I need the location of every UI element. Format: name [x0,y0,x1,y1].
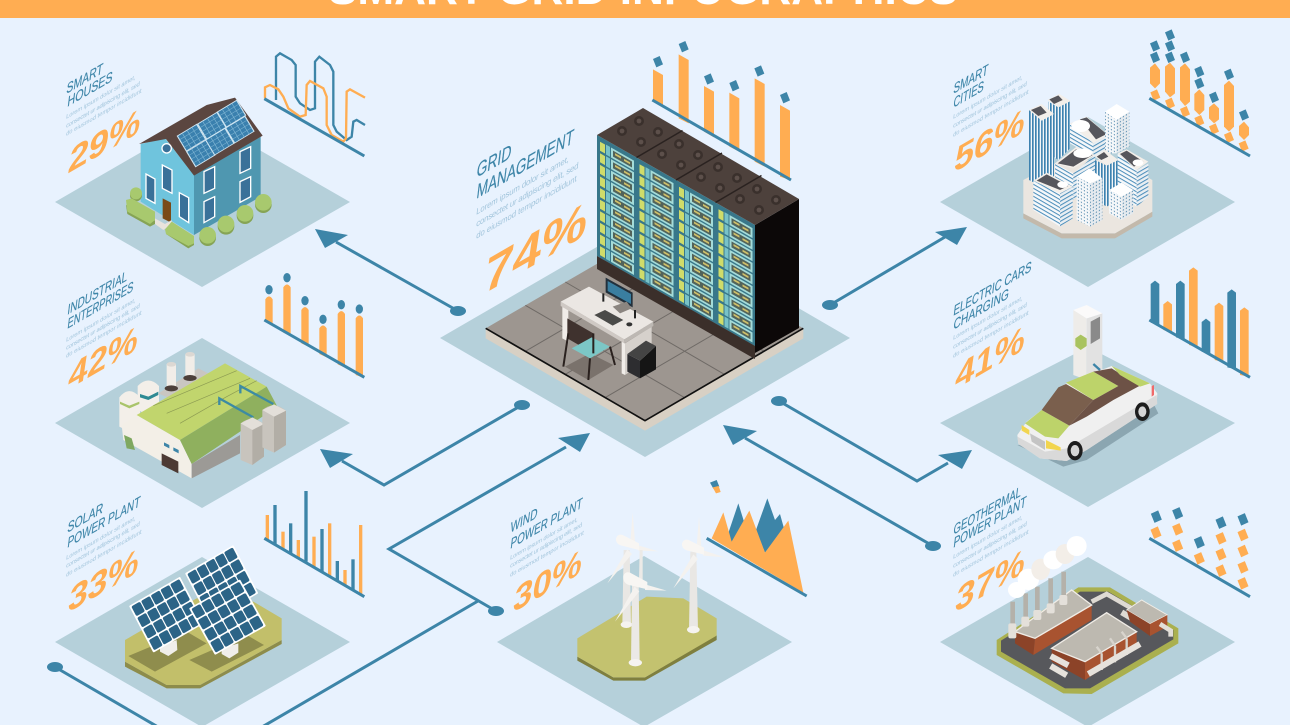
text block: do eiusmod tempor incididunt [953,528,1029,579]
plate [497,556,792,725]
marker chart [1149,29,1250,156]
heading: wind power plant: WIND [510,504,538,537]
bar chart [264,273,364,377]
arrow: geothermal to grid [723,425,941,551]
heading: solar power plant: POWER PLANT [67,493,141,552]
icon: floor platform [486,236,803,431]
panel: geothermal power plant [940,483,1250,725]
marker chart [1149,507,1250,597]
text block: consectet ur adipiscing elit, sed [510,521,583,570]
panel: solar power plant [55,491,364,725]
panel: smart cities [940,29,1250,287]
text block: Lorem ipsum dolor sit amet, [953,514,1023,561]
heading: grid management: GRID [475,140,513,183]
panel: industrial enterprises [55,268,364,508]
heading: grid management [475,125,575,204]
text block: do eiusmod tempor incididunt [66,528,142,579]
heading: geothermal power plant: GEOTHERMAL [953,483,1022,539]
icon: house [126,98,272,248]
plate [940,347,1235,507]
heading: industrial enterprises: ENTERPRISES [67,278,134,333]
text block: Lorem ipsum dolor sit amet, [510,516,578,562]
text block: consectet ur adipiscing elit, sed [953,80,1027,130]
heading: electric cars charging: CHARGING [953,285,1010,334]
text block: Lorem ipsum dolor sit amet, [953,74,1023,121]
text block: do eiusmod tempor incididunt [510,529,584,579]
text block: consectet ur adipiscing elit, sed [953,301,1027,351]
heading: solar power plant: SOLAR [67,499,104,537]
line chart [264,53,365,156]
text block: do eiusmod tempor incididunt [953,88,1029,139]
arrow: grid to industrial enterprises [320,400,530,485]
text block: consectet ur adipiscing elit, sed [953,520,1027,570]
title band [0,0,1290,18]
icon: solar panels [125,545,282,688]
heading: geothermal power plant: POWER PLANT [953,493,1027,552]
text block: do eiusmod tempor incididunt [953,309,1029,360]
percentage 30%: 30% [511,540,585,621]
bar chart [1149,267,1250,377]
percentage 74%: 74% [480,190,592,307]
heading: smart cities: SMART [953,61,989,98]
text block: do eiusmod tempor incididunt [66,309,142,360]
icon: factory [119,352,286,478]
arrow: grid to electric cars [771,396,972,481]
plate [55,557,350,725]
panel: electric cars charging [940,258,1250,507]
heading: grid management: MANAGEMENT [475,125,575,204]
heading: smart cities: CITIES [953,78,985,112]
area chart [707,480,807,596]
text block: consectet ur adipiscing elit, sed [66,520,140,570]
plate [940,117,1235,287]
text block: do eiusmod tempor incididunt [66,87,142,138]
arrow: solar feed line [47,601,478,725]
plate [55,117,350,287]
percentage 42%: 42% [66,316,141,398]
percentage 41%: 41% [953,316,1028,398]
text block: Lorem ipsum dolor sit amet, [66,297,136,344]
panel: wind power plant [497,480,807,725]
text block: consectet ur adipiscing elit, sed [66,302,140,352]
percentage 37%: 37% [953,539,1028,621]
icon: geothermal plant [997,536,1178,694]
text block: Lorem ipsum dolor sit amet, [476,154,569,217]
icon: city buildings [1023,94,1152,238]
heading: smart houses: HOUSES [67,68,114,111]
heading: wind power plant [510,495,583,553]
text block: consectet ur adipiscing elit, sed [66,80,140,130]
heading: electric cars charging [953,258,1032,334]
plate [440,219,850,457]
icon: server racks [597,108,799,359]
bar chart [652,41,791,180]
heading: smart cities [953,61,989,112]
plate [940,557,1235,725]
text block: Lorem ipsum dolor sit amet, [66,74,136,121]
percentage 29%: 29% [66,99,144,182]
icon: electric car [1017,366,1158,467]
panel: smart houses [55,53,365,287]
arrow: wind to grid [389,433,590,616]
plate [55,338,350,508]
heading: solar power plant [67,493,141,552]
text block: Lorem ipsum dolor sit amet, [953,295,1023,342]
heading: wind power plant: POWER PLANT [510,495,583,553]
icon: wind turbines [577,513,725,681]
panel: grid management [440,41,850,457]
percentage 56%: 56% [952,99,1028,181]
bar chart [264,491,364,597]
heading: industrial enterprises [67,268,134,333]
text block: Lorem ipsum dolor sit amet, [66,515,136,562]
icon: desk with monitor and chair [561,278,656,380]
arrow: grid to smart houses [315,229,466,316]
arrow: grid to smart cities [822,227,967,310]
percentage 33%: 33% [66,539,142,621]
heading: industrial enterprises: INDUSTRIAL [67,268,128,319]
text block: do eiusmod tempor incididunt [476,173,578,241]
heading: electric cars charging: ELECTRIC CARS [953,258,1032,320]
heading: smart houses: SMART [66,60,104,98]
icon: charging station [1073,305,1102,380]
text block: consectet ur adipiscing elit, sed [476,160,579,229]
